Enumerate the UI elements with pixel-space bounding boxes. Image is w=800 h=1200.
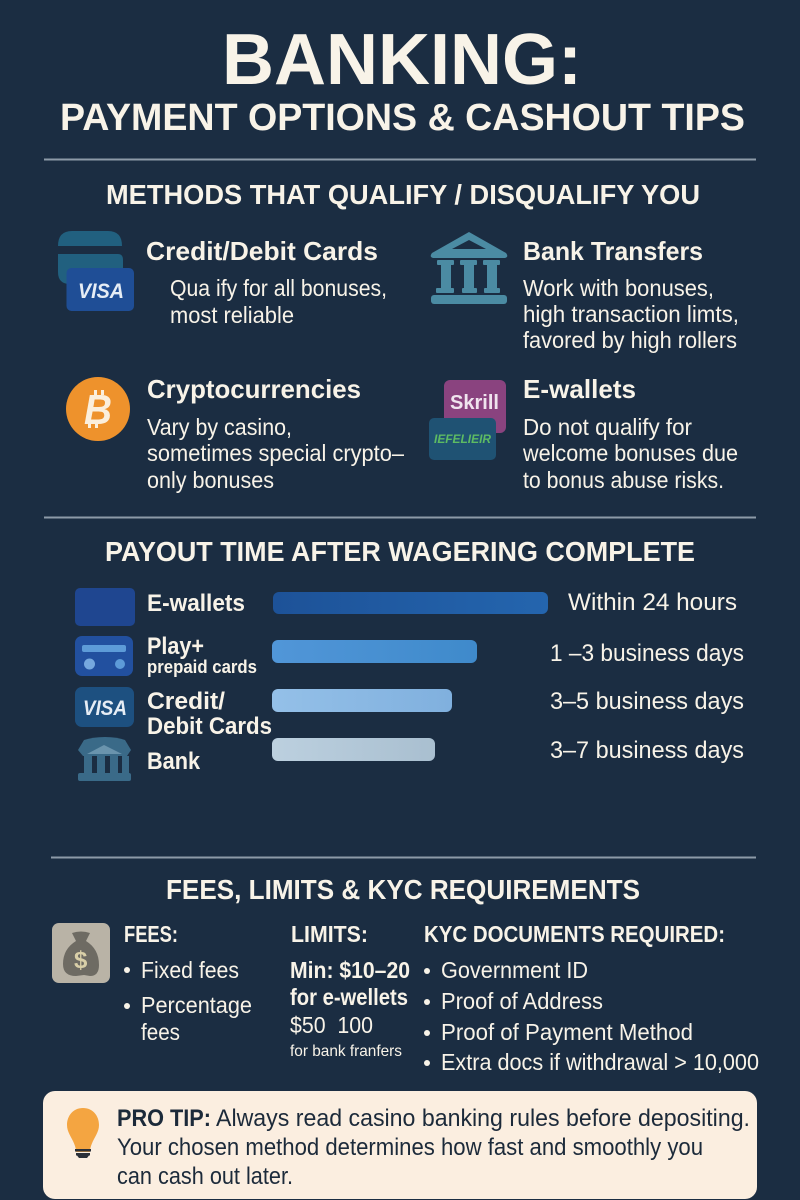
bar: e-wallets xyxy=(273,592,548,614)
kyc column: Proof of Payment Method xyxy=(441,1019,693,1045)
title: BANKING: xyxy=(222,20,582,100)
method: bank transfers: Bank Transfers xyxy=(523,236,703,266)
method: cryptocurrencies: sometimes special crypto– xyxy=(147,440,404,466)
icon: bitcoin xyxy=(66,377,130,441)
icon: bitcoin: B xyxy=(84,386,112,433)
label: bank: Bank xyxy=(147,748,201,775)
method: e-wallets: E-wallets xyxy=(523,374,636,404)
panel: fees, limits and kyc xyxy=(52,874,759,1075)
method: cryptocurrencies: Cryptocurrencies xyxy=(147,374,361,404)
icon: cards xyxy=(58,231,134,311)
icon: e-wallet logos: Skrill xyxy=(450,392,499,414)
bar: credit/debit xyxy=(272,689,452,712)
limits column: Min: $10–20 xyxy=(290,957,410,983)
label: e-wallets: E-wallets xyxy=(147,590,245,617)
tip text: PRO TIP: xyxy=(117,1105,211,1132)
callout: pro tip xyxy=(43,1091,757,1199)
limits column: $50 100 xyxy=(290,1012,373,1038)
limits column: for e-wellets xyxy=(290,984,408,1010)
icon: bank xyxy=(431,232,507,304)
method: cryptocurrencies: Vary by casino, xyxy=(147,414,292,440)
icon: e-wallet logos: IEFELIEIR xyxy=(434,432,491,446)
kyc column: Extra docs if withdrawal > 10,000 xyxy=(441,1049,759,1075)
kyc column: Proof of Address xyxy=(441,988,603,1014)
method: credit and debit cards: Credit/Debit Cards xyxy=(146,236,378,266)
label: play+ prepaid cards xyxy=(147,633,257,677)
icon: prepaid card xyxy=(75,636,133,676)
fees column xyxy=(124,921,252,1045)
bar: play+ xyxy=(272,640,477,663)
heading: methods: METHODS THAT QUALIFY / DISQUALIFY YOU xyxy=(106,179,700,210)
label: credit/debit cards xyxy=(147,688,272,740)
method: credit and debit cards xyxy=(146,236,387,328)
method: credit and debit cards: Qua ify for all bonuses, xyxy=(170,275,387,301)
method: credit and debit cards: most reliable xyxy=(170,302,294,328)
fees column: Fixed fees xyxy=(141,957,239,983)
value: play+: 1 –3 business days xyxy=(550,640,744,667)
label: credit/debit cards: Debit Cards xyxy=(147,713,272,740)
method: cryptocurrencies: only bonuses xyxy=(147,467,274,493)
icon: visa card: VISA xyxy=(83,697,127,720)
limits column: for bank franfers xyxy=(290,1043,402,1060)
limits column: LIMITS: xyxy=(291,921,368,947)
method: e-wallets: to bonus abuse risks. xyxy=(523,467,724,493)
method: e-wallets xyxy=(522,374,738,493)
method: cryptocurrencies xyxy=(147,374,404,493)
method: e-wallets: Do not qualify for xyxy=(523,414,692,440)
fees column: FEES: xyxy=(124,921,178,947)
heading: payout: PAYOUT TIME AFTER WAGERING COMPLETE xyxy=(105,536,695,567)
kyc column: Government ID xyxy=(441,957,588,983)
value: credit/debit: 3–5 business days xyxy=(550,688,744,715)
title xyxy=(60,20,745,139)
panel: qualifying methods xyxy=(58,179,739,493)
tip text: can cash out later. xyxy=(117,1163,293,1190)
value: bank: 3–7 business days xyxy=(550,737,744,764)
icon: e-wallet square xyxy=(75,588,135,626)
label: credit/debit cards: Credit/ xyxy=(147,688,225,715)
icon: small bank xyxy=(78,737,131,781)
limits column xyxy=(290,921,410,1060)
value: e-wallets: Within 24 hours xyxy=(568,589,737,616)
fees column: fees xyxy=(141,1019,180,1045)
tip text xyxy=(117,1105,750,1190)
kyc column xyxy=(424,921,759,1075)
icon: visa card xyxy=(75,687,134,727)
method: bank transfers: Work with bonuses, xyxy=(523,275,714,301)
label: play+ prepaid cards: prepaid cards xyxy=(147,657,257,677)
label: play+ prepaid cards: Play+ xyxy=(147,633,204,660)
heading: fees limits kyc: FEES, LIMITS & KYC REQUIREMENTS xyxy=(166,874,640,905)
bar: bank xyxy=(272,738,435,761)
title: PAYMENT OPTIONS & CASHOUT TIPS xyxy=(60,97,745,139)
icon: e-wallet logos xyxy=(429,380,506,460)
tip text: Always read casino banking rules before depositing. xyxy=(216,1105,750,1132)
method: bank transfers: favored by high rollers xyxy=(523,327,737,353)
method: e-wallets: welcome bonuses due xyxy=(522,440,738,466)
fees column: Percentage xyxy=(141,992,252,1018)
panel: payout time xyxy=(75,536,744,781)
icon: cards: VISA xyxy=(78,280,124,303)
kyc column: KYC DOCUMENTS REQUIRED: xyxy=(424,921,725,947)
icon: light bulb xyxy=(67,1108,99,1158)
icon: money bag xyxy=(52,923,110,983)
tip text: Your chosen method determines how fast and smoothly you xyxy=(117,1134,703,1161)
method: bank transfers: high transaction limts, xyxy=(523,301,739,327)
icon: money bag: $ xyxy=(74,947,88,974)
method: bank transfers xyxy=(523,236,739,353)
